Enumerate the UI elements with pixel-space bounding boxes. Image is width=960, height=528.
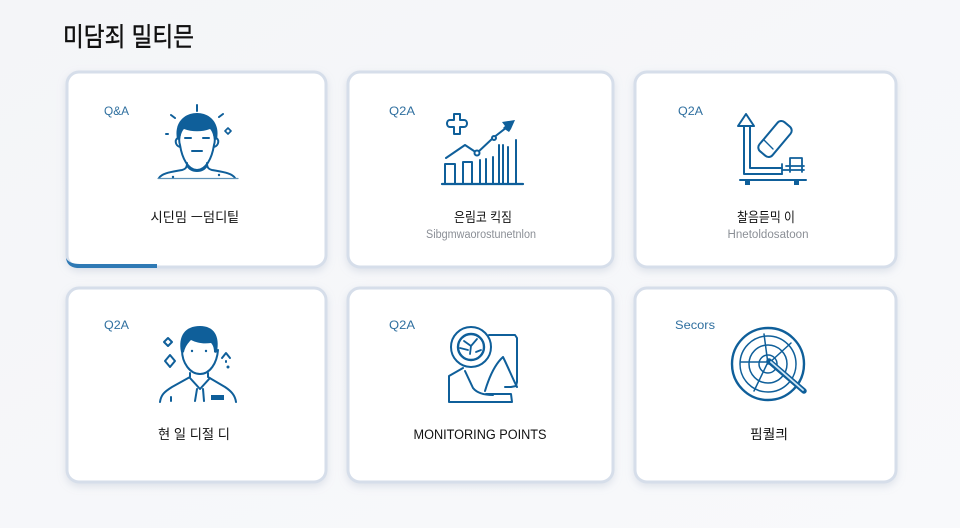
- panel: card 4 professional: [67, 288, 326, 482]
- icon: smiling person: [158, 105, 238, 178]
- icon: magnifier over head: [449, 327, 517, 402]
- label: 현 일 디절 디: [158, 427, 230, 442]
- tag: Q2A: [678, 104, 703, 118]
- tag: Secors: [675, 318, 715, 332]
- label: 찰음듣믹 이: [737, 210, 795, 225]
- tag: Q2A: [104, 318, 129, 332]
- panel: card 2 growth chart: [348, 72, 613, 267]
- panel: card 5 monitoring points: [348, 288, 613, 482]
- label: MONITORING POINTS: [414, 427, 546, 442]
- title: 미담죄 밀티믄: [63, 22, 194, 52]
- subtitle: Hnetoldosatoon: [728, 229, 808, 241]
- icon: bar chart with rising arrow: [442, 114, 523, 184]
- icon: radar dial: [732, 328, 804, 400]
- tag: Q&A: [104, 104, 129, 118]
- progress bar: [66, 258, 157, 268]
- tag: Q2A: [389, 318, 415, 332]
- subtitle: Sibgmwaorostunetnlon: [426, 229, 536, 241]
- panel: card 3 scale: [635, 72, 896, 267]
- icon: measuring scale: [738, 114, 806, 185]
- panel: card 1 person: [66, 72, 326, 268]
- icon: man in shirt and tie: [160, 326, 236, 402]
- label: 핌퀄킈: [750, 427, 788, 442]
- label: 시딘밈 ㅡ덤디팉: [150, 210, 240, 225]
- label: 은림코 킥짐: [454, 210, 512, 225]
- panel: card 6 sectors: [635, 288, 896, 482]
- tag: Q2A: [389, 104, 415, 118]
